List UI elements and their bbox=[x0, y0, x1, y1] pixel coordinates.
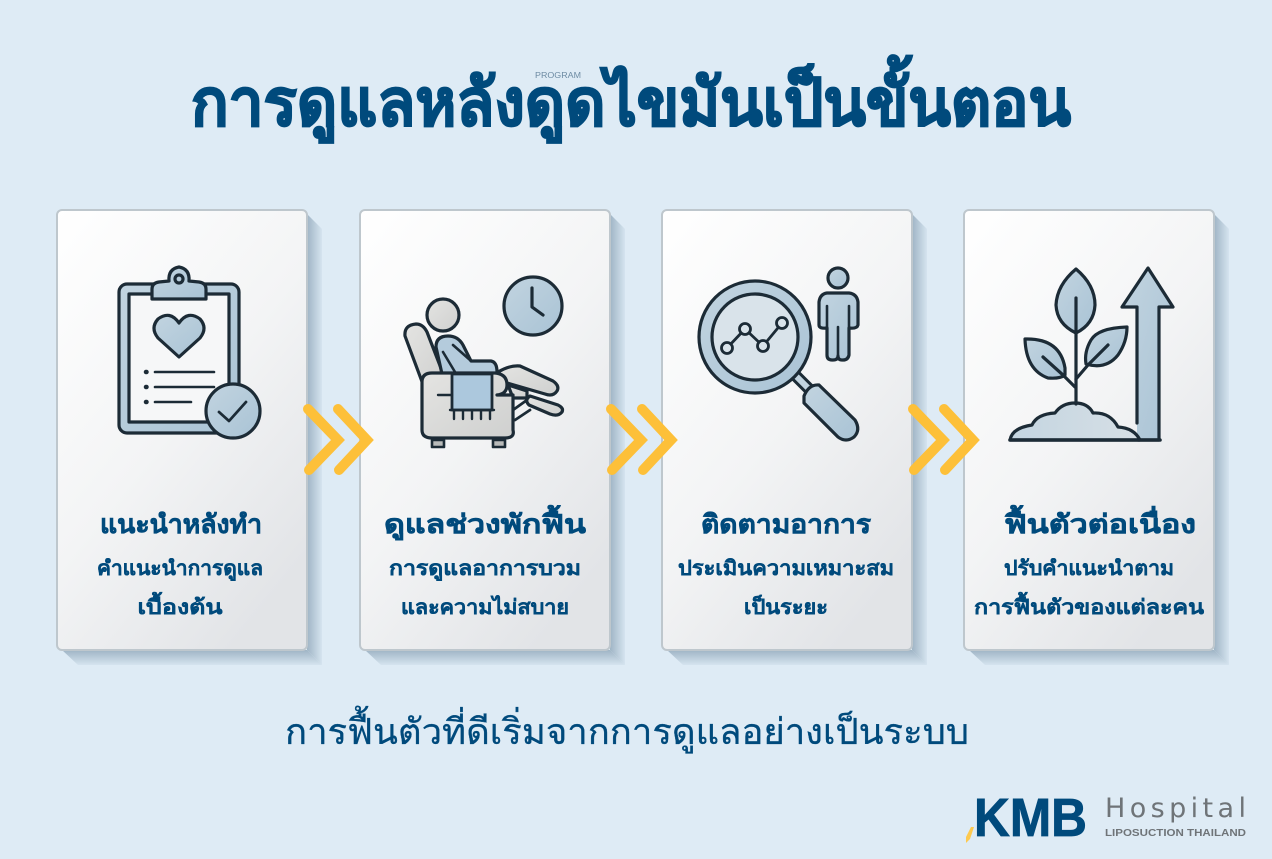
heading: แนะนำหลังทำ bbox=[100, 509, 262, 539]
description: ประเมินความเหมาะสม bbox=[678, 557, 894, 580]
title: การดูแลหลังดูดไขมันเป็นขั้นตอน bbox=[191, 54, 1071, 144]
description: ปรับคำแนะนำตาม bbox=[1004, 557, 1174, 580]
panel: step 2: และความไม่สบาย bbox=[401, 595, 569, 619]
arrow: step 2 to 3 bbox=[611, 409, 671, 470]
icon: magnifier with chart and person bbox=[699, 268, 858, 440]
logo: KMB Hospital: Hospital bbox=[1105, 793, 1246, 824]
icon: seedling with growth arrow bbox=[1010, 268, 1173, 440]
description: การดูแลอาการบวม bbox=[389, 557, 581, 582]
icon: clipboard with heart and check bbox=[119, 267, 260, 438]
panel: step 1 bbox=[57, 210, 322, 665]
heading: ดูแลช่วงพักฟื้น bbox=[384, 504, 586, 541]
arrow: step 1 to 2 bbox=[308, 409, 367, 470]
panel: step 2 bbox=[360, 210, 625, 665]
logo: KMB Hospital: KMB bbox=[974, 788, 1087, 848]
logo: KMB Hospital: LIPOSUCTION THAILAND bbox=[1105, 827, 1246, 839]
tagline: การฟื้นตัวที่ดีเริ่มจากการดูแลอย่างเป็นระบบ bbox=[285, 705, 969, 754]
heading: ติดตามอาการ bbox=[701, 509, 871, 539]
arrow: step 3 to 4 bbox=[913, 409, 973, 470]
panel: step 1: เบื้องต้น bbox=[138, 591, 222, 619]
panel: step 4 bbox=[964, 210, 1229, 665]
panel: step 3: เป็นระยะ bbox=[744, 593, 828, 619]
icon: person resting in recliner with clock bbox=[405, 277, 562, 447]
description: คำแนะนำการดูแล bbox=[97, 557, 263, 582]
panel: step 4: การฟื้นตัวของแต่ละคน bbox=[974, 591, 1204, 619]
panel: step 3 bbox=[662, 210, 927, 665]
small label: program: PROGRAM bbox=[535, 70, 581, 80]
logo: KMB Hospital bbox=[966, 788, 1246, 848]
heading: ฟื้นตัวต่อเนื่อง bbox=[1004, 504, 1196, 539]
